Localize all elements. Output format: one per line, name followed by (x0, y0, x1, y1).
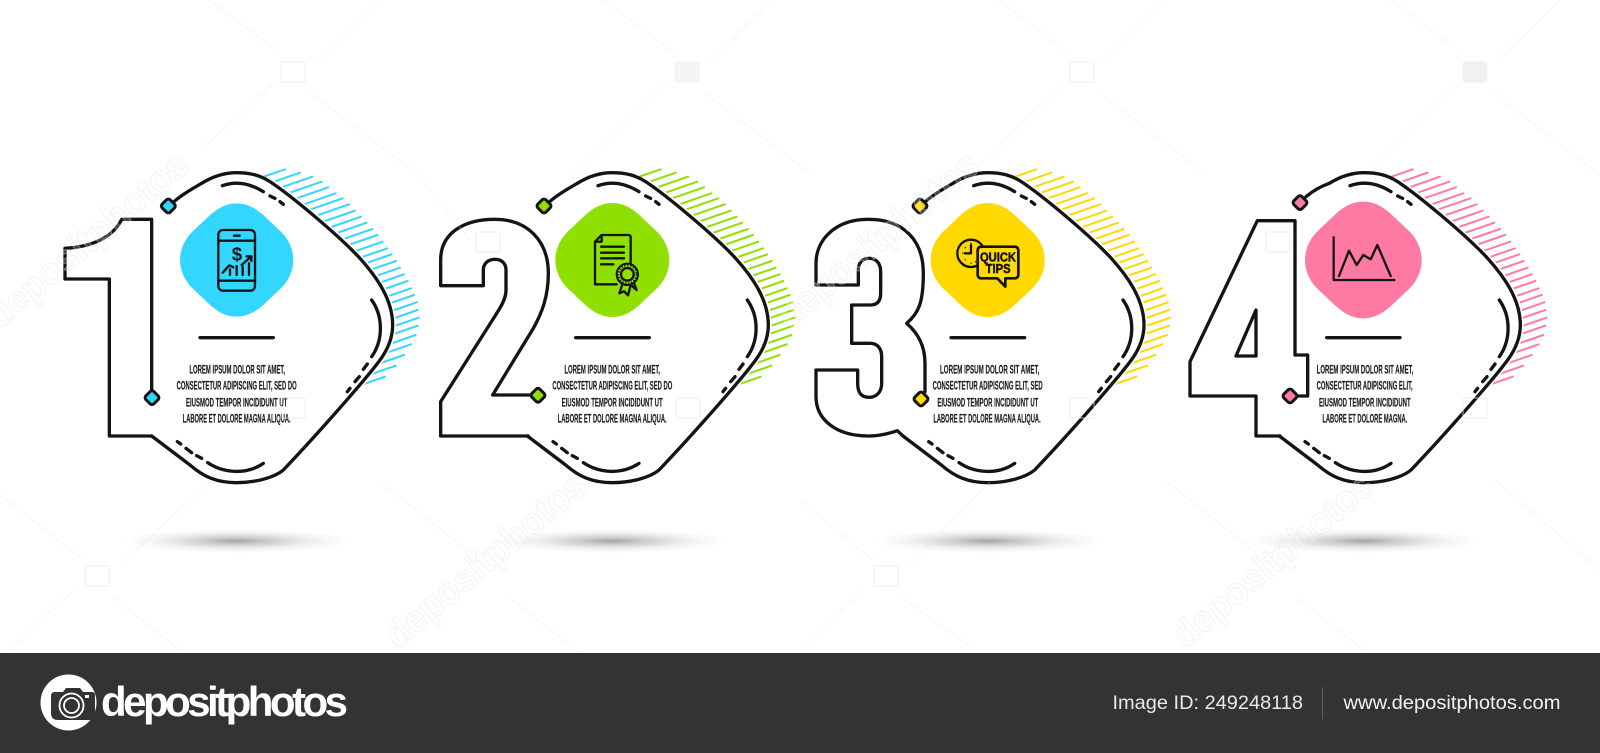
text block: CONSECTETUR ADIPISCING ELIT, SED DO (177, 380, 297, 393)
divider (200, 333, 273, 343)
icon: phone with dollar chart (218, 230, 255, 291)
text block: CONSECTETUR ADIPISCING ELIT, SED (933, 380, 1043, 393)
text block: LABORE ET DOLORE MAGNA. (1322, 413, 1407, 426)
icon: certificate document (595, 235, 638, 295)
hatching: pink (1363, 169, 1546, 394)
outline blob 2 (527, 173, 768, 483)
node: bottom (144, 390, 160, 406)
watermark text: depositphotos (769, 144, 987, 337)
icon tile (1305, 202, 1422, 318)
numeral 1 (65, 219, 152, 436)
text block (177, 363, 297, 426)
icon: phone with dollar chart: $ (232, 244, 243, 265)
footer logo icon (40, 674, 96, 730)
connector 1 (174, 183, 202, 202)
outline blob 3 (903, 173, 1144, 483)
text block: EIUSMOD TEMPOR INCIDIDUNT UT (186, 396, 287, 409)
text block: EIUSMOD TEMPOR INCIDIDUNT (1319, 396, 1411, 409)
text block: LABORE ET DOLORE MAGNA ALIQUA. (558, 413, 667, 426)
text block: LOREM IPSUM DOLOR SIT AMET, (564, 363, 660, 376)
footer divider (1322, 687, 1323, 719)
icon: quick tips clock and speech bubble (957, 240, 1018, 287)
website: www.depositphotos.com (1342, 692, 1560, 714)
footer bar (0, 653, 1600, 753)
node: top (1292, 195, 1308, 211)
node: bottom (1282, 388, 1298, 404)
text block (933, 363, 1043, 426)
outline blob 1 (152, 173, 393, 483)
node: top (912, 198, 928, 214)
panel 4: step four (1190, 169, 1546, 483)
text block: LABORE ET DOLORE MAGNA ALIQUA. (183, 413, 291, 426)
icon tile (555, 203, 669, 317)
node: bottom (913, 391, 929, 407)
text block (1317, 363, 1413, 426)
numeral 3 (816, 219, 925, 436)
outline blob 4 (1279, 173, 1520, 483)
icon: quick tips clock and speech bubble: QUICK (980, 250, 1017, 264)
connector 2 (550, 183, 577, 202)
ground shadows (122, 529, 1479, 553)
hatching: blue (235, 169, 419, 394)
text block: LOREM IPSUM DOLOR SIT AMET, (940, 363, 1039, 376)
node: top (536, 198, 552, 214)
text block: LABORE ET DOLORE MAGNA ALIQUA. (933, 413, 1041, 426)
node: top (160, 198, 176, 214)
panel 1: step one (65, 169, 419, 483)
connector 3 (925, 183, 953, 202)
divider (576, 333, 649, 343)
icon tile (180, 203, 293, 317)
numeral 4 counter (1236, 310, 1256, 356)
text block: EIUSMOD TEMPOR INCIDIDUNT UT (562, 396, 663, 409)
watermark text: depositphotos (377, 464, 595, 657)
divider (1327, 333, 1400, 343)
icon tile (931, 203, 1045, 317)
text block: LOREM IPSUM DOLOR SIT AMET, (1317, 363, 1413, 376)
text block: CONSECTETUR ADIPISCING ELIT, (1317, 380, 1413, 393)
watermark text (0, 144, 1383, 657)
footer logo wordmark: depositphotos (101, 678, 348, 725)
hatching: green (611, 169, 794, 394)
watermark text: depositphotos (1165, 464, 1383, 657)
text block: EIUSMOD TEMPOR INCIDIDUNT UT (937, 396, 1038, 409)
divider (951, 333, 1025, 343)
connector 4 (1306, 183, 1329, 197)
image id: Image ID: 249248118 (1112, 692, 1303, 714)
text block: CONSECTETUR ADIPISCING ELIT, SED DO (552, 380, 672, 393)
numeral 2 (441, 219, 548, 436)
text block (552, 363, 672, 426)
icon: quick tips clock and speech bubble: TIPS (986, 262, 1011, 276)
icon: line chart (1334, 237, 1394, 280)
panel 3: step three (816, 169, 1170, 483)
numeral 4 (1190, 221, 1308, 436)
panel 2: step two (441, 169, 794, 483)
text block: LOREM IPSUM DOLOR SIT AMET, (189, 363, 285, 376)
node: bottom (530, 387, 546, 403)
hatching: yellow (986, 169, 1170, 394)
